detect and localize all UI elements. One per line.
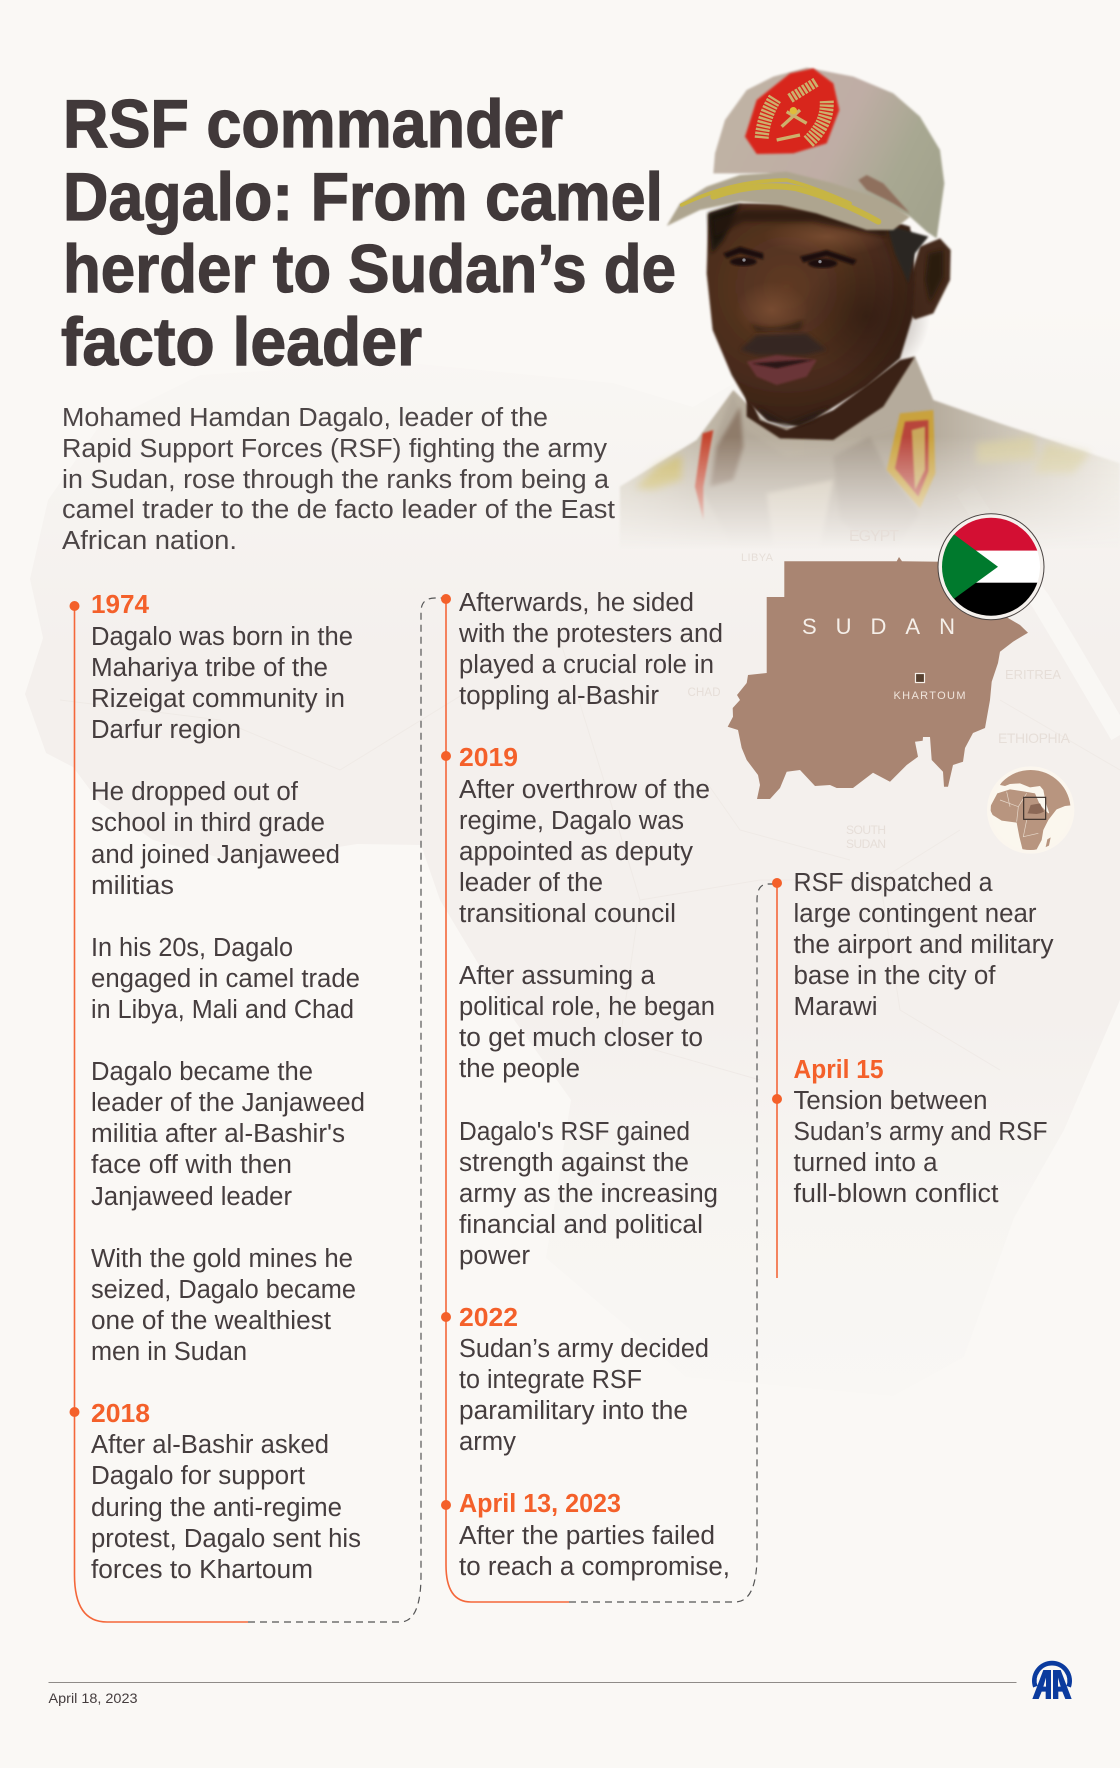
1974 entry (91, 591, 365, 1366)
2022 entry: army (459, 1428, 516, 1456)
intro text block (62, 404, 615, 555)
2019 entry: the people (459, 1055, 580, 1083)
icon: Anadolu Agency logo (1032, 1663, 1072, 1699)
2018 entry: forces to Khartoum (91, 1556, 313, 1584)
1974 entry: face off with then (91, 1151, 292, 1179)
2018 entry (91, 1400, 361, 1584)
April 13, 2023 entry continued: the airport and military (794, 931, 1054, 959)
1974 entry: Janjaweed leader (91, 1183, 292, 1211)
2019 entry: Dagalo's RSF gained (459, 1118, 690, 1146)
April 13, 2023 entry: to reach a compromise, (459, 1553, 730, 1581)
icon: locator globe (990, 770, 1070, 850)
1974 entry: engaged in camel trade (91, 965, 360, 993)
2022 entry: paramilitary into the (459, 1397, 688, 1425)
April 13, 2023 entry: After the parties failed (459, 1522, 715, 1550)
title: herder to Sudan’s de (63, 231, 676, 307)
1974 entry: seized, Dagalo became (91, 1276, 356, 1304)
2019 entry: political role, he began (459, 993, 715, 1021)
portrait: ear (908, 238, 951, 319)
April 13, 2023 entry continued: RSF dispatched a (794, 869, 993, 897)
title: RSF commander (63, 86, 563, 162)
2019 entry: strength against the (459, 1149, 689, 1177)
1974 entry: Darfur region (91, 716, 241, 744)
2019 entry: transitional council (459, 900, 676, 928)
1974 entry: militias (91, 872, 174, 900)
title (61, 86, 676, 380)
1974 entry: leader of the Janjaweed (91, 1089, 365, 1117)
1974 entry: men in Sudan (91, 1338, 247, 1366)
footer rule (48, 1682, 1016, 1683)
2018 entry: After al-Bashir asked (91, 1431, 329, 1459)
1974 entry: and joined Janjaweed (91, 841, 340, 869)
2019 entry: leader of the (459, 869, 603, 897)
intro text block: camel trader to the de facto leader of the East (62, 496, 615, 524)
2018 entry: protest, Dagalo sent his (91, 1525, 361, 1553)
2019 entry: army as the increasing (459, 1180, 718, 1208)
1974 entry: He dropped out of (91, 778, 299, 806)
1974 entry: 1974 (91, 591, 150, 619)
date: April 18, 2023 (48, 1691, 138, 1706)
map: Sudan (728, 557, 1028, 799)
1974 entry: militia after al-Bashir's (91, 1120, 345, 1148)
background map of Africa (25, 300, 1120, 1396)
map: neighbouring country labels: CHAD (688, 687, 720, 699)
1974 entry: Rizeigat community in (91, 685, 345, 713)
2019 entry: After assuming a (459, 962, 656, 990)
1974 entry: school in third grade (91, 809, 325, 837)
portrait: cap brown patches (858, 175, 910, 213)
title: Dagalo: From camel (63, 159, 663, 235)
portrait: face (707, 203, 915, 427)
April 13, 2023 entry (459, 1490, 730, 1581)
map: neighbouring country labels: ERITREA (1005, 667, 1061, 682)
intro text block: Mohamed Hamdan Dagalo, leader of the (62, 404, 548, 432)
map: Khartoum marker (916, 674, 924, 682)
2019 entry: appointed as deputy (459, 838, 693, 866)
2019 entry: financial and political (459, 1211, 703, 1239)
2019 entry: After overthrow of the (459, 776, 710, 804)
1974 entry: Dagalo was born in the (91, 623, 353, 651)
title: facto leader (61, 304, 422, 380)
1974 entry: in Libya, Mali and Chad (91, 996, 354, 1024)
2018 entry: Dagalo for support (91, 1462, 305, 1490)
timeline column 3 (794, 869, 1054, 1208)
portrait: red cap badge (745, 68, 839, 154)
April 13, 2023 entry continued: Marawi (794, 993, 878, 1021)
portrait: gold badge emblem (762, 82, 827, 142)
2019 entry: to get much closer to (459, 1024, 703, 1052)
intro text block: African nation. (62, 527, 237, 555)
April 13, 2023 entry: April 13, 2023 (459, 1490, 621, 1518)
2019 entry: power (459, 1242, 531, 1270)
portrait: facial features (713, 210, 930, 427)
portrait: cap crown (713, 68, 944, 238)
icon: Sudan flag (938, 514, 1044, 620)
April 15 entry: April 15 (794, 1056, 884, 1084)
1974 entry: With the gold mines he (91, 1245, 353, 1273)
2022 entry (459, 1304, 709, 1456)
2018 entry: 2018 (91, 1400, 150, 1428)
April 13, 2023 entry continued (794, 869, 1054, 1021)
April 13, 2023 entry continued: large contingent near (794, 900, 1037, 928)
timeline column 2 (458, 589, 730, 1581)
April 13, 2023 entry continued: base in the city of (794, 962, 996, 990)
1974 entry: one of the wealthiest (91, 1307, 331, 1335)
1974 entry: Mahariya tribe of the (91, 654, 328, 682)
2018 entry continued: toppling al-Bashir (459, 682, 660, 710)
timeline connectors (74, 598, 777, 1622)
map: neighbouring country labels: SOUTH (846, 823, 886, 837)
1974 entry: Dagalo became the (91, 1058, 313, 1086)
portrait: gold visor embroidery (682, 180, 878, 222)
intro text block: in Sudan, rose through the ranks from being a (62, 466, 610, 494)
2018 entry continued (458, 589, 723, 710)
April 15 entry (794, 1056, 1048, 1208)
2018 entry continued: with the protesters and (458, 620, 723, 648)
April 15 entry: Sudan’s army and RSF (794, 1118, 1048, 1146)
map: neighbouring country labels (688, 528, 1071, 851)
2018 entry: during the anti-regime (91, 1494, 342, 1522)
map: Khartoum label: KHARTOUM (894, 690, 966, 702)
portrait: uniform and shoulders (620, 356, 1120, 540)
map: Sudan country shape (728, 557, 1028, 799)
map: neighbouring country labels: SUDAN (846, 837, 886, 851)
portrait: hair (887, 225, 928, 283)
April 15 entry: Tension between (794, 1087, 988, 1115)
map: neighbouring country labels: ETHIOPHIA (998, 730, 1071, 746)
map: Sudan label: SUDAN (802, 614, 955, 639)
portrait: neck (747, 357, 915, 440)
portrait: cap visor (667, 172, 910, 230)
April 15 entry: turned into a (794, 1149, 938, 1177)
portrait of Mohamed Hamdan Dagalo (620, 68, 1120, 573)
2018 entry continued: Afterwards, he sided (459, 589, 694, 617)
2022 entry: Sudan’s army decided (459, 1335, 709, 1363)
April 15 entry: full-blown conflict (794, 1180, 998, 1208)
2019 entry: 2019 (459, 744, 518, 772)
2022 entry: to integrate RSF (459, 1366, 642, 1394)
2019 entry (459, 744, 718, 1270)
timeline column 1 (91, 591, 365, 1584)
map: neighbouring country labels: EGYPT (849, 528, 899, 545)
2022 entry: 2022 (459, 1304, 518, 1332)
map: neighbouring country labels: LIBYA (741, 552, 774, 564)
1974 entry: In his 20s, Dagalo (91, 934, 293, 962)
2019 entry: regime, Dagalo was (459, 807, 684, 835)
2018 entry continued: played a crucial role in (459, 651, 714, 679)
timeline markers (70, 594, 782, 1510)
intro text block: Rapid Support Forces (RSF) fighting the army (62, 435, 607, 463)
